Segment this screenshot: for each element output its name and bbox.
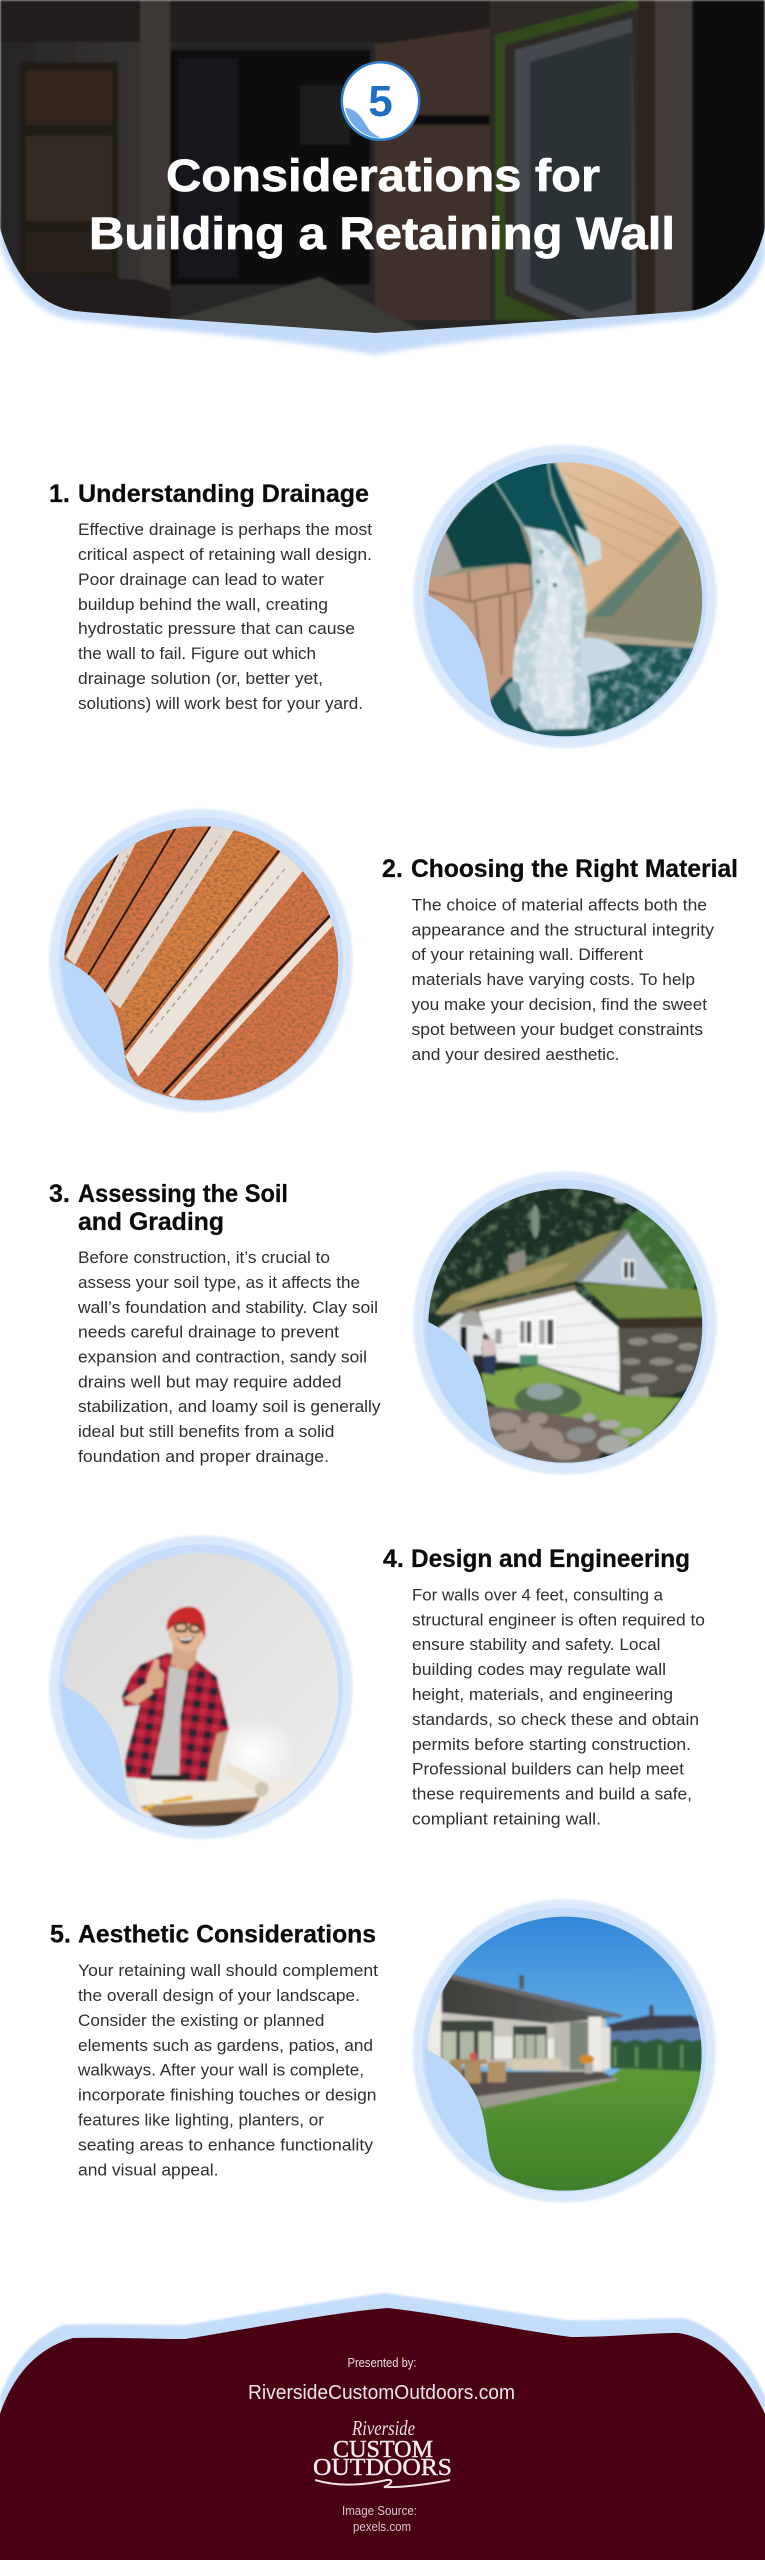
text block: engineering: ensure stability and safety. Local — [412, 1636, 660, 1654]
text block: soil: needs careful drainage to prevent — [78, 1324, 339, 1342]
heading: 2: Choosing the Right Material — [411, 855, 738, 883]
text block: aesthetics: features like lighting, planters, or — [78, 2112, 325, 2130]
header banner — [0, 0, 765, 355]
header background photo: dark interior — [0, 0, 765, 345]
text block: material: The choice of material affects both the — [412, 896, 707, 914]
logo: OUTDOORS — [313, 2455, 452, 2481]
text block: engineering: these requirements and build a safe, — [412, 1786, 692, 1804]
text block: engineering: compliant retaining wall. — [412, 1810, 601, 1828]
text block: aesthetics: Consider the existing or planned — [78, 2012, 324, 2030]
text block: engineering: height, materials, and engineering — [412, 1686, 673, 1704]
panel: choosing the right material — [49, 809, 738, 1113]
heading: 4: Design and Engineering — [411, 1545, 690, 1573]
photo: white house with grass roof — [413, 1171, 717, 1475]
panel: understanding drainage — [49, 445, 717, 748]
text block: soil: assess your soil type, as it affects the — [78, 1274, 360, 1292]
text block: material: appearance and the structural integrity — [412, 922, 715, 940]
text block: soil: foundation and proper drainage. — [78, 1448, 329, 1466]
footer blue wave — [0, 2293, 765, 2440]
text block: drainage: critical aspect of retaining wall design. — [78, 546, 372, 564]
text block: drainage — [78, 521, 372, 713]
text block: soil: drains well but may require added — [78, 1374, 342, 1392]
footer — [0, 2293, 765, 2560]
text block: aesthetics: elements such as gardens, patios, and — [78, 2037, 373, 2055]
photo: cheerful builder with blueprints — [49, 1536, 353, 1839]
text block: aesthetics: walkways. After your wall is complete, — [77, 2062, 364, 2080]
image source: pexels.com — [353, 2519, 411, 2534]
text block: soil: wall’s foundation and stability. Clay soil — [77, 1299, 378, 1317]
heading: 5: 5. — [50, 1920, 71, 1948]
title: Considerations for — [166, 150, 600, 201]
number badge: 5 — [368, 77, 393, 126]
photo: OSB wood boards — [49, 809, 353, 1113]
heading: 2: 2. — [382, 855, 403, 883]
panel: aesthetic considerations — [50, 1899, 718, 2203]
text block: drainage: drainage solution (or, better yet, — [78, 670, 323, 688]
text block: drainage: Poor drainage can lead to water — [78, 571, 325, 589]
title: Building a Retaining Wall — [89, 208, 675, 259]
text block: drainage: hydrostatic pressure that can cause — [78, 620, 355, 638]
logo: Riverside — [351, 2416, 415, 2440]
title — [89, 150, 675, 259]
image source — [342, 2503, 417, 2534]
text block: aesthetics: seating areas to enhance functionality — [78, 2136, 374, 2154]
header blue wave — [0, 215, 765, 355]
text block: soil: expansion and contraction, sandy soil — [78, 1348, 367, 1366]
text block: engineering — [412, 1586, 705, 1828]
text block: aesthetics: incorporate finishing touches or design — [78, 2086, 376, 2104]
photo: modern house and lawn — [413, 1899, 718, 2203]
heading: 3: 3. — [49, 1180, 70, 1208]
text block: material: you make your decision, find the sweet — [412, 996, 707, 1014]
text block: drainage: solutions) will work best for your yard. — [78, 695, 363, 713]
logo — [313, 2416, 452, 2487]
text block: drainage: buildup behind the wall, creating — [78, 596, 328, 614]
text block: engineering: permits before starting construction. — [412, 1736, 691, 1754]
heading: 3: Assessing the Soil — [78, 1180, 288, 1208]
text block: material — [412, 896, 715, 1064]
text block: material: materials have varying costs. To help — [412, 971, 695, 989]
heading: 1: Understanding Drainage — [78, 480, 369, 508]
website: RiversideCustomOutdoors.com — [248, 2382, 515, 2404]
panel: design and engineering — [49, 1536, 705, 1839]
heading: 3: and Grading — [78, 1208, 224, 1236]
text block: engineering: standards, so check these and obtain — [412, 1711, 699, 1729]
text block: aesthetics: Your retaining wall should complement — [78, 1962, 378, 1980]
text block: engineering: For walls over 4 feet, consulting a — [412, 1586, 664, 1604]
text block: aesthetics — [77, 1962, 378, 2180]
heading: 1: 1. — [49, 480, 70, 508]
heading: 5: Aesthetic Considerations — [78, 1920, 376, 1948]
panel: assessing the soil and grading — [49, 1171, 717, 1475]
text block: engineering: Professional builders can help meet — [412, 1760, 684, 1778]
text block: material: and your desired aesthetic. — [412, 1046, 620, 1064]
heading: 3 — [49, 1180, 288, 1236]
text block: soil: Before construction, it’s crucial to — [78, 1249, 330, 1267]
text block: soil: ideal but still benefits from a solid — [78, 1423, 334, 1441]
number badge — [340, 61, 420, 141]
presented by: Presented by: — [348, 2355, 416, 2370]
text block: aesthetics: the overall design of your landscape. — [78, 1987, 360, 2005]
text block: drainage: the wall to fail. Figure out which — [78, 645, 316, 663]
text block: soil — [77, 1249, 381, 1466]
text block: material: spot between your budget constraints — [412, 1021, 703, 1039]
text block: engineering: building codes may regulate wall — [412, 1661, 666, 1679]
text block: material: of your retaining wall. Different — [412, 946, 643, 964]
photo: downspout pouring water — [413, 445, 717, 748]
text block: soil: stabilization, and loamy soil is generally — [78, 1398, 381, 1416]
image source: Image Source: — [342, 2503, 417, 2518]
logo: CUSTOM — [333, 2437, 433, 2463]
heading: 4: 4. — [383, 1545, 404, 1573]
text block: engineering: structural engineer is often required to — [412, 1612, 705, 1630]
footer maroon panel — [0, 2308, 765, 2560]
text block: drainage: Effective drainage is perhaps the most — [78, 521, 372, 539]
text block: aesthetics: and visual appeal. — [78, 2162, 218, 2180]
